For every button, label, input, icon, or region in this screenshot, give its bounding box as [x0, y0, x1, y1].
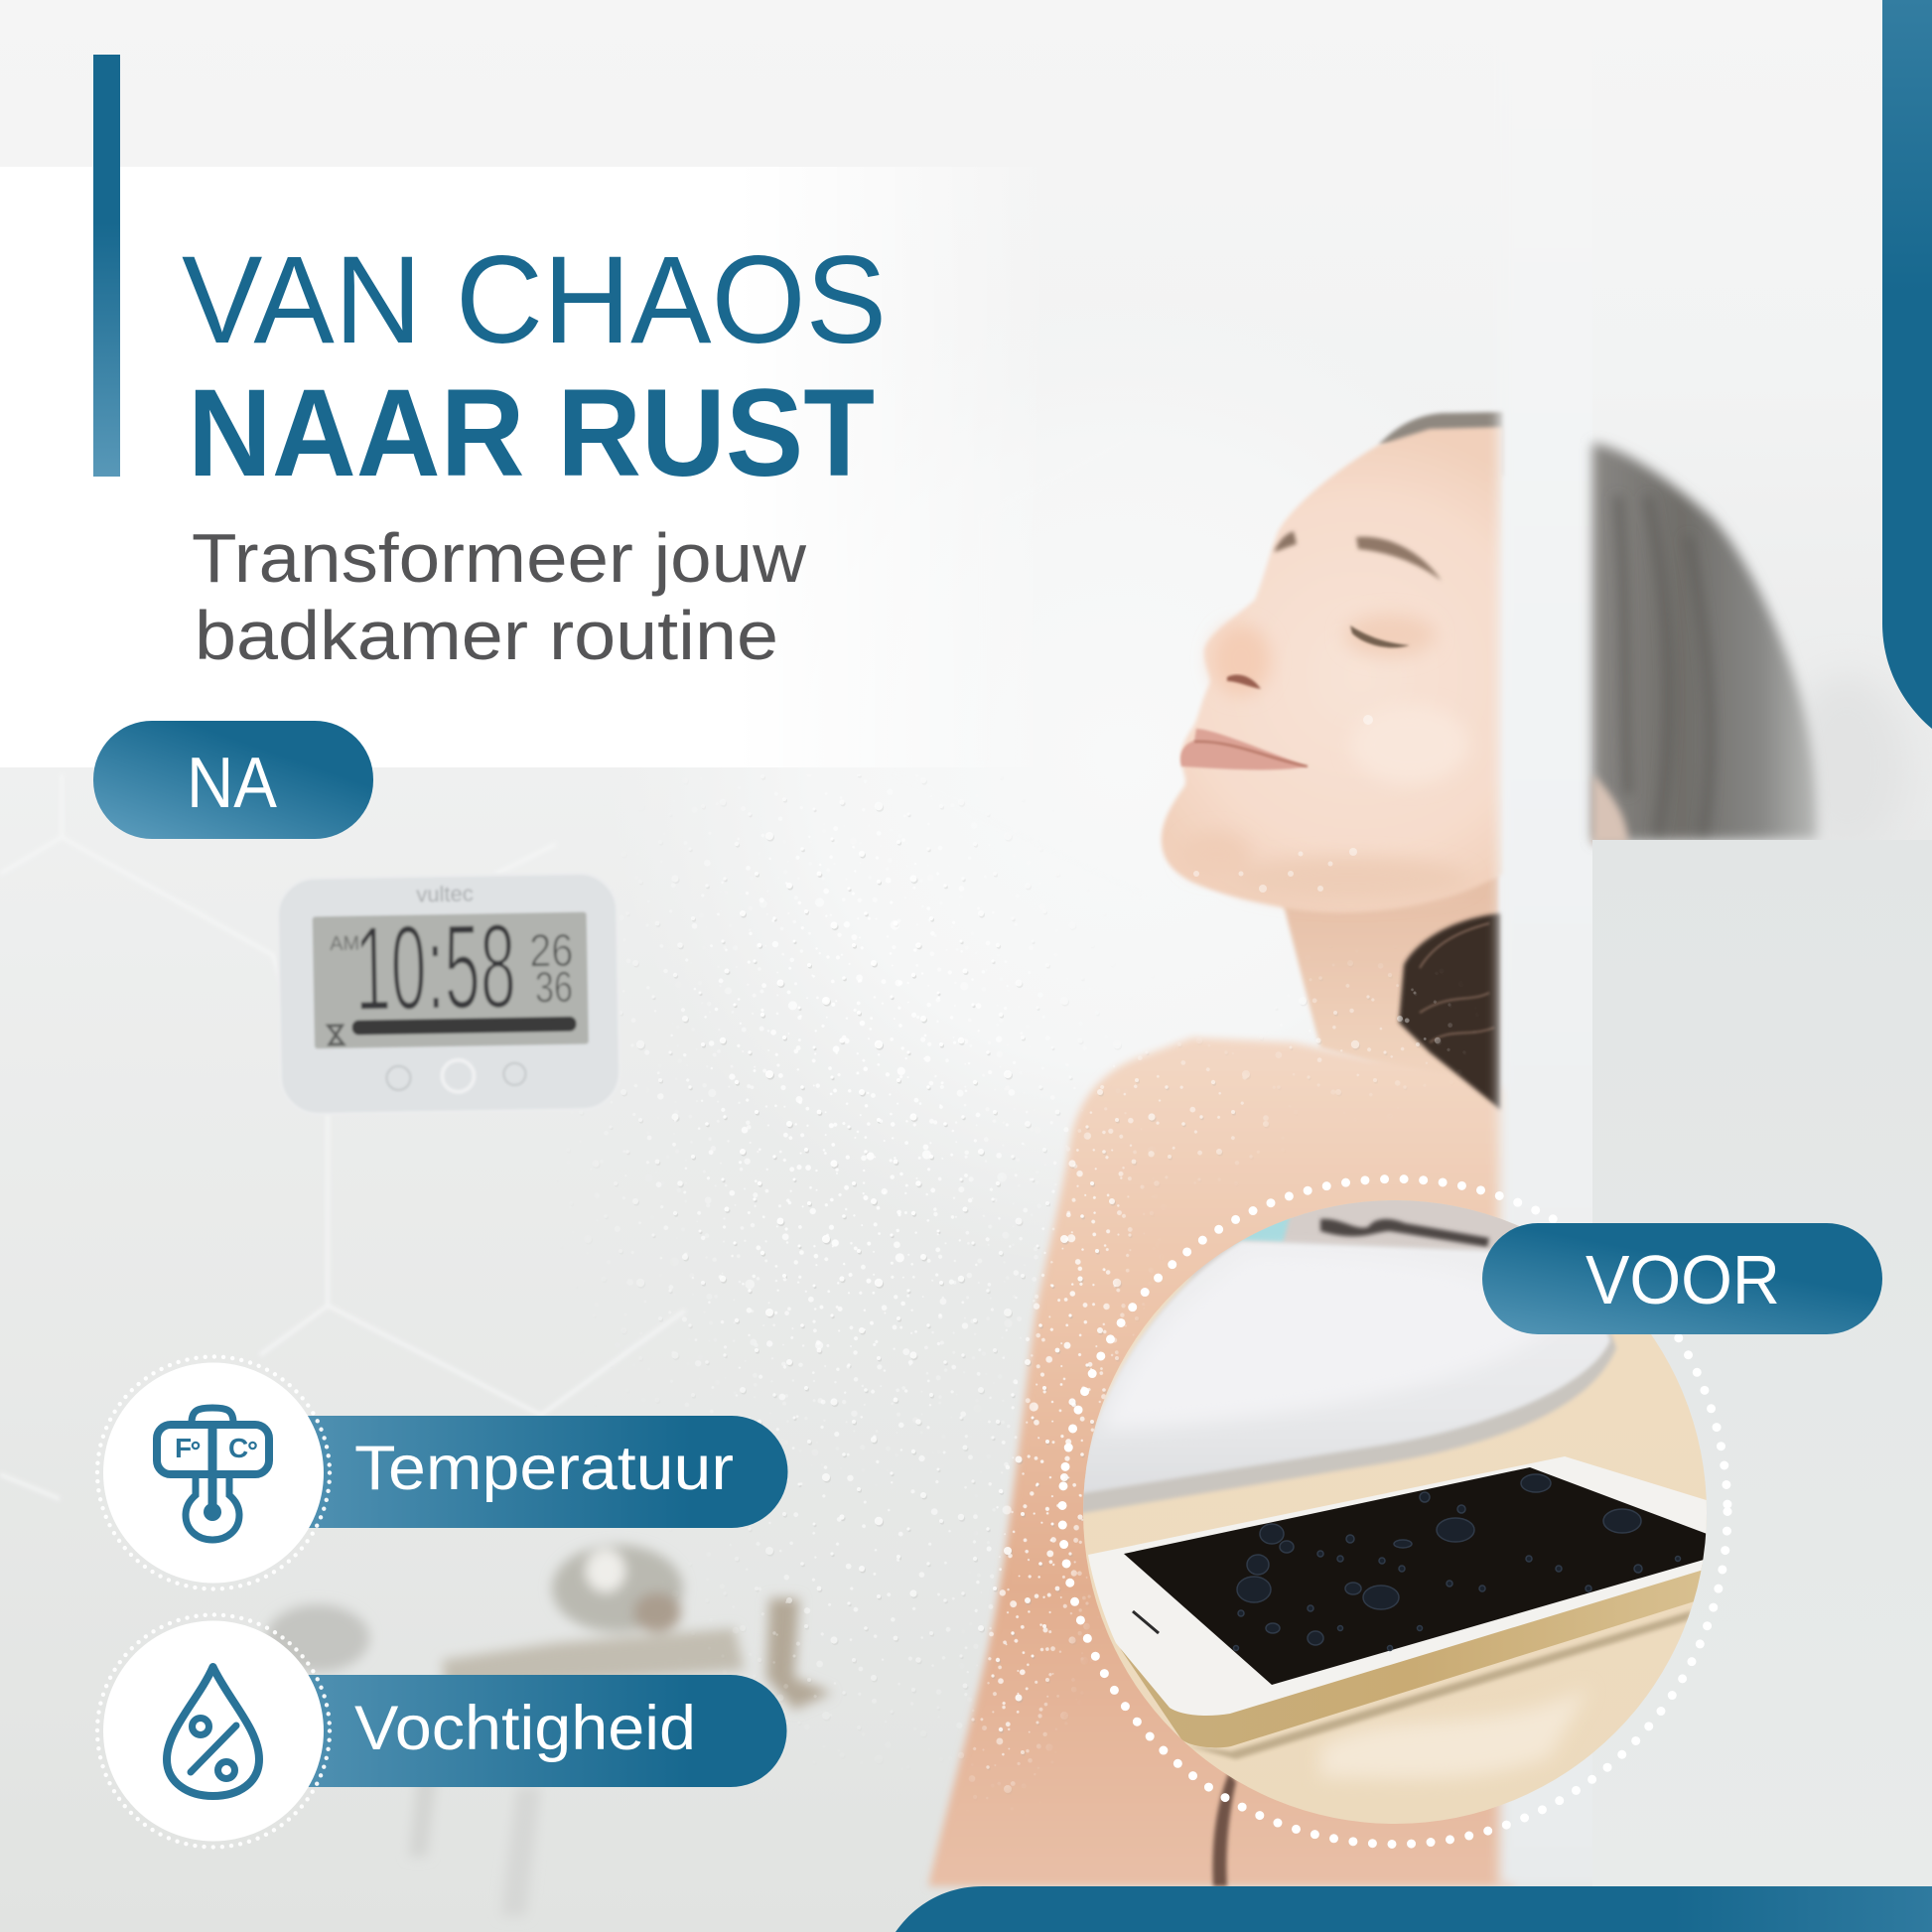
- arm and torso: [928, 1037, 1514, 1886]
- label: NA: NA: [187, 744, 277, 823]
- subtitle: [192, 519, 806, 674]
- phone gold edge: [1120, 1564, 1706, 1747]
- shower clock device: [277, 873, 621, 1115]
- left eyebrow: [1274, 531, 1297, 552]
- face shading: [1182, 614, 1469, 900]
- brand: vultec: [416, 882, 474, 907]
- glass panel lower right: [1592, 840, 1932, 1886]
- buttons: [386, 1059, 526, 1093]
- circle: [103, 1620, 324, 1841]
- label: VOOR: VOOR: [1586, 1241, 1780, 1318]
- phone white body: [1088, 1456, 1710, 1716]
- speaker: [1133, 1611, 1159, 1633]
- hair strands: [1618, 496, 1710, 834]
- hair on forehead: [1379, 412, 1504, 477]
- skin water beads: [1193, 715, 1373, 893]
- hair behind glass: [1592, 443, 1817, 844]
- label: Temperatuur: [354, 1434, 734, 1503]
- dotted ring: [97, 1356, 330, 1588]
- glass panel upper right: [1592, 0, 1932, 844]
- label: VOOR: [1482, 1223, 1882, 1334]
- subtitle: badkamer routine: [195, 597, 778, 674]
- woman in the shower: [928, 412, 1514, 1886]
- hourglass icon: [329, 1026, 344, 1044]
- time reading: 10:58: [353, 898, 517, 1036]
- marble veins: [1320, 1688, 1588, 1779]
- right eyebrow: [1356, 537, 1442, 581]
- subtitle: Transformeer jouw: [192, 519, 806, 597]
- droplet field: [622, 776, 1465, 1799]
- tile wall lines: [0, 437, 1142, 1499]
- title: VAN CHAOS: [182, 231, 887, 369]
- dotted ring: [1062, 1179, 1727, 1845]
- photo: [1077, 1191, 1713, 1827]
- icon: humidity drop: [167, 1667, 259, 1796]
- sink: [1077, 1241, 1616, 1514]
- ear behind glass: [1592, 774, 1628, 844]
- icon: thermometer: [157, 1408, 269, 1540]
- feature: temperatuur: C: [228, 1433, 248, 1463]
- accent bar: [93, 55, 120, 477]
- shower photo background: [0, 409, 1932, 1932]
- feature: temperatuur: F: [175, 1433, 192, 1463]
- dotted ring: [97, 1614, 330, 1847]
- lips: [1180, 729, 1308, 769]
- title: NAAR RUST: [188, 364, 875, 502]
- humidity reading: 36: [534, 963, 573, 1012]
- dense droplet core: [735, 913, 1144, 1783]
- gap between arm and torso: [1213, 1772, 1236, 1886]
- water drops on screen: [1233, 1474, 1680, 1650]
- blurred shower faucet: [266, 1545, 832, 1916]
- title: [182, 231, 887, 502]
- white header panel: [0, 167, 1052, 767]
- label: NA: [93, 721, 373, 839]
- water droplets on glass: [622, 776, 1465, 1799]
- blurred background: [1191, 1200, 1519, 1277]
- timer bar: [351, 1017, 577, 1035]
- label: Vochtigheid: [354, 1694, 696, 1763]
- clock screen: [313, 912, 589, 1048]
- before photo circle: wet phone: [1062, 1179, 1727, 1845]
- dark wet hair: [1399, 913, 1501, 1110]
- top right corner shape: [1882, 0, 1932, 729]
- nostril: [1227, 675, 1261, 689]
- pill: [308, 1675, 786, 1787]
- temperature reading: 26: [529, 924, 574, 977]
- AM label: AM: [330, 933, 359, 955]
- circle: [103, 1362, 324, 1583]
- phone screen: [1124, 1467, 1710, 1685]
- pill: [308, 1416, 788, 1528]
- haze beside hair: [1787, 675, 1906, 854]
- bottom band: [896, 1886, 1932, 1932]
- door frame: [1499, 0, 1688, 1886]
- face: [1162, 427, 1504, 912]
- feature: temperatuur: [97, 1356, 788, 1588]
- neck: [1281, 874, 1499, 1082]
- closed eye: [1350, 625, 1410, 647]
- feature: vochtigheid: [97, 1614, 786, 1847]
